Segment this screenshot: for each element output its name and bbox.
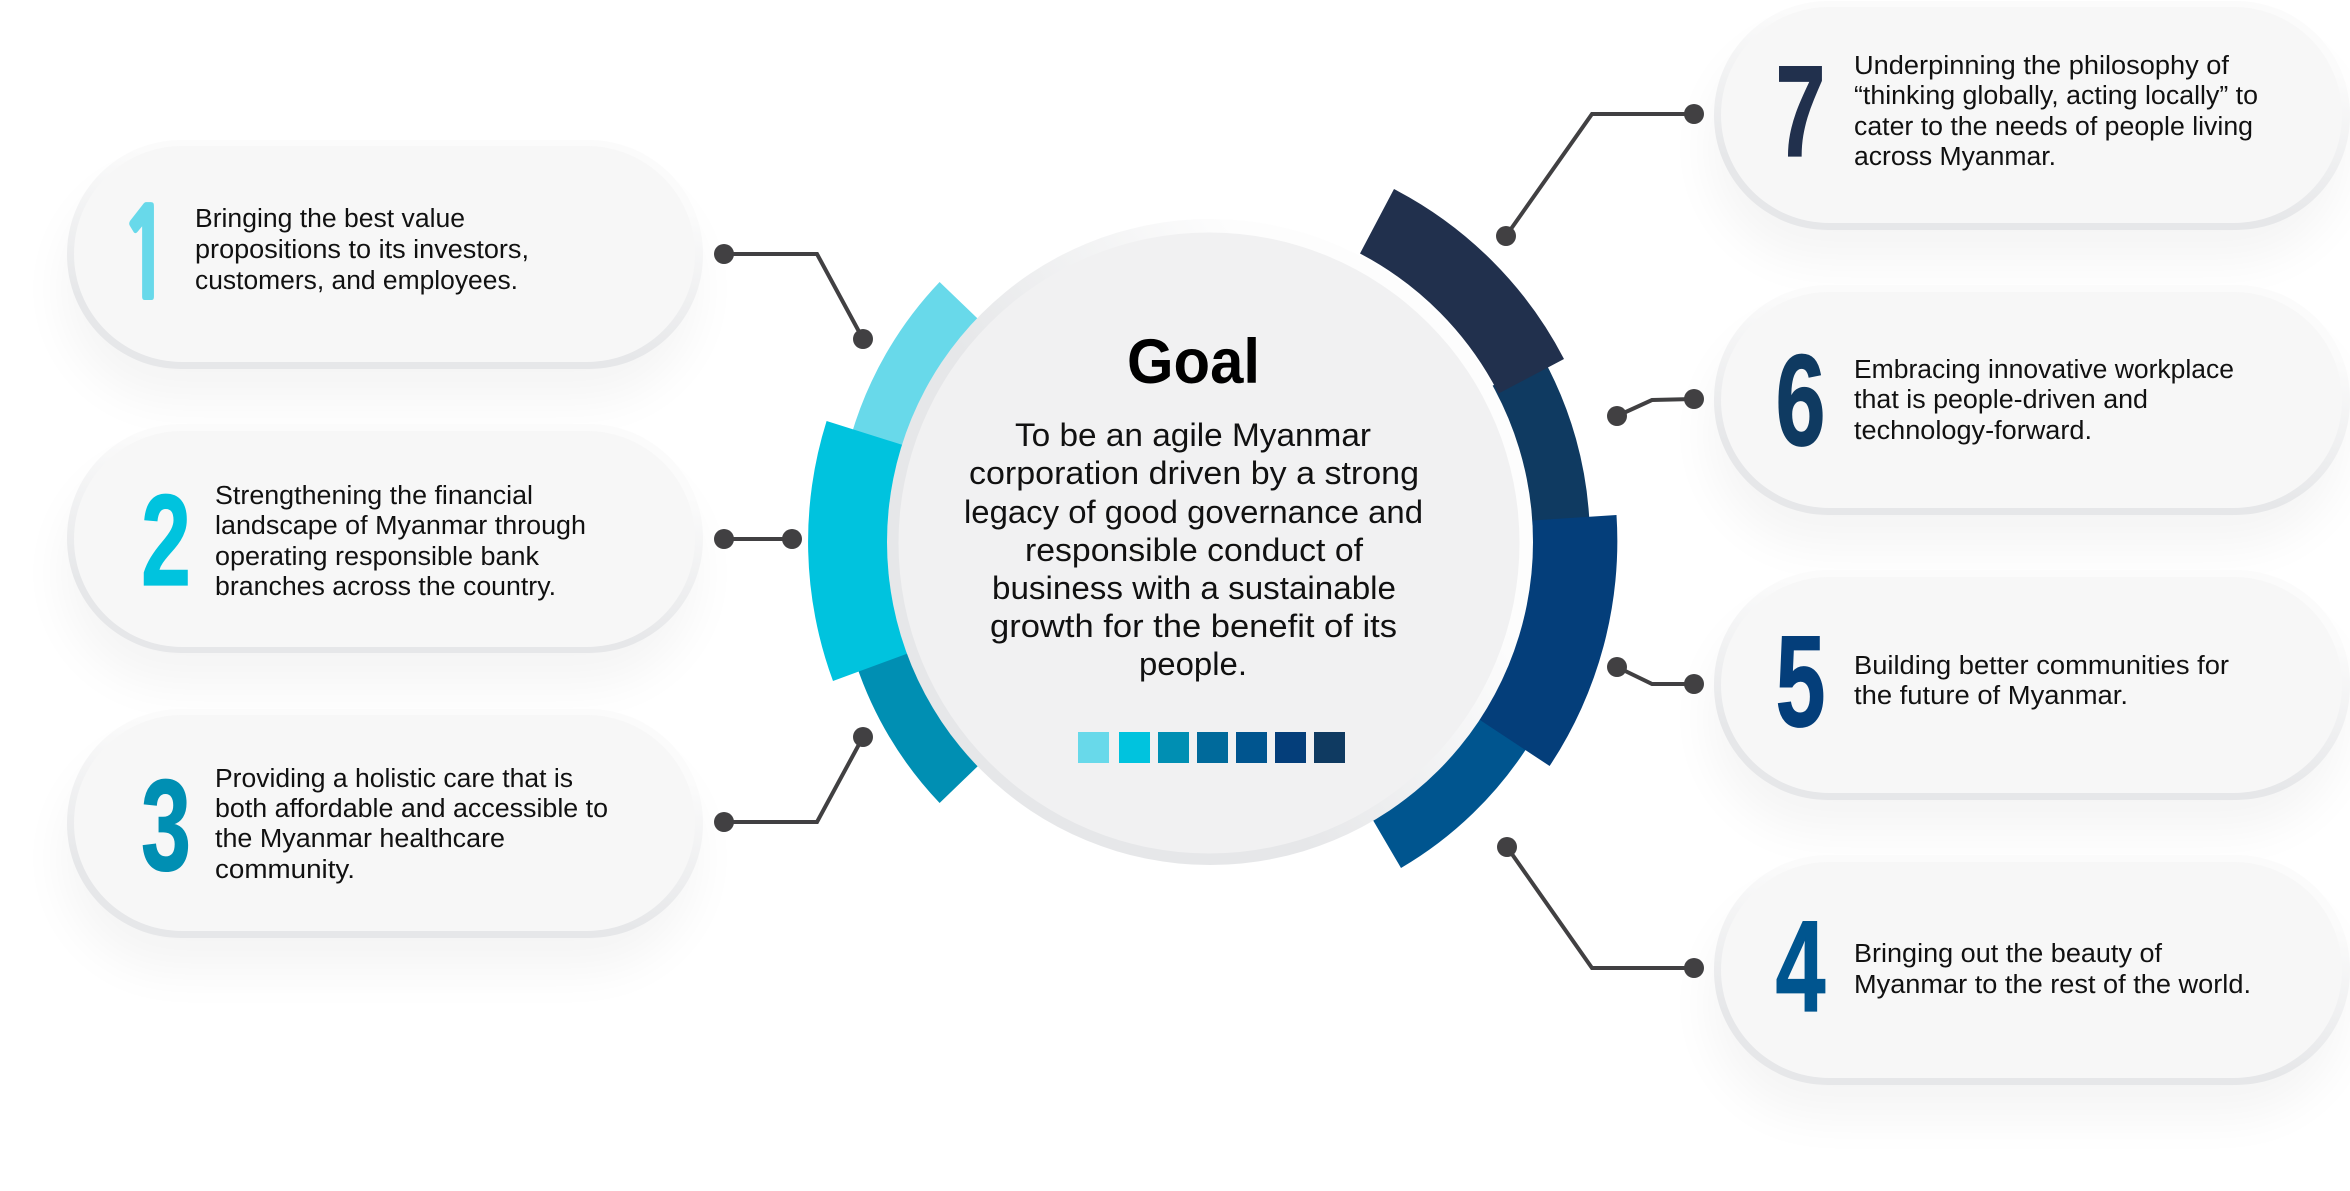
text: item 6 bbox=[1854, 356, 2234, 445]
connector 7 bbox=[1496, 104, 1704, 246]
number 1: 1 bbox=[119, 194, 173, 318]
text: item 6: that is people-driven and bbox=[1854, 386, 2148, 414]
text: item 5: Building better communities for bbox=[1854, 652, 2230, 680]
text: item 3: community. bbox=[215, 856, 355, 884]
text: item 4 bbox=[1854, 940, 2251, 999]
arc segment 7 bbox=[1360, 189, 1564, 394]
text: item 4: Bringing out the beauty of bbox=[1854, 940, 2163, 968]
text: goal statement: people. bbox=[1139, 646, 1247, 682]
text: item 3: both affordable and accessible to bbox=[215, 795, 608, 823]
panel: item 2 bbox=[62, 424, 703, 687]
text: item 2: branches across the country. bbox=[215, 573, 556, 601]
panel: item 5 bbox=[1709, 570, 2350, 833]
text: item 5 bbox=[1854, 652, 2230, 710]
number 6: 6 bbox=[1776, 327, 1825, 473]
number 5: 5 bbox=[1776, 608, 1825, 754]
text: goal statement: legacy of good governance and bbox=[964, 494, 1423, 530]
center circle bbox=[887, 219, 1533, 865]
text: goal statement bbox=[964, 417, 1423, 682]
panel: item 3 bbox=[62, 709, 703, 972]
arc segment 1 bbox=[851, 282, 994, 458]
connector 3 bbox=[714, 727, 873, 832]
text: goal statement: business with a sustainable bbox=[992, 570, 1396, 606]
text: item 4: Myanmar to the rest of the world. bbox=[1854, 971, 2251, 999]
panel: item 4 bbox=[1709, 855, 2350, 1118]
text: item 7 bbox=[1854, 52, 2258, 171]
panel: item 1 bbox=[62, 140, 703, 403]
colour legend squares bbox=[1078, 732, 1345, 763]
text: item 5: the future of Myanmar. bbox=[1854, 682, 2128, 710]
text: item 7: cater to the needs of people living bbox=[1854, 113, 2253, 141]
text: goal statement: corporation driven by a strong bbox=[969, 455, 1419, 491]
number 4: 4 bbox=[1776, 893, 1825, 1039]
text: item 1: propositions to its investors, bbox=[195, 236, 529, 264]
text: item 1: Bringing the best value bbox=[195, 205, 465, 233]
text: item 2: operating responsible bank bbox=[215, 543, 539, 571]
arc segment 2 bbox=[808, 421, 929, 681]
connector 4 bbox=[1497, 837, 1704, 978]
text: item 6: Embracing innovative workplace bbox=[1854, 356, 2234, 384]
text: item 2: landscape of Myanmar through bbox=[215, 512, 586, 540]
panel: item 6 bbox=[1709, 285, 2350, 548]
heading: Goal: Goal bbox=[1127, 327, 1260, 397]
text: item 3: the Myanmar healthcare bbox=[215, 825, 505, 853]
arc segment 4 bbox=[1362, 700, 1530, 868]
text: item 1: customers, and employees. bbox=[195, 267, 518, 295]
text: goal statement: growth for the benefit of its bbox=[990, 608, 1397, 644]
text: item 7: Underpinning the philosophy of bbox=[1854, 52, 2230, 80]
text: goal statement: responsible conduct of bbox=[1025, 532, 1363, 568]
text: item 2 bbox=[215, 482, 586, 601]
text: item 7: “thinking globally, acting locally” to bbox=[1854, 82, 2258, 110]
arc segment 5 bbox=[1460, 515, 1617, 766]
text: item 3 bbox=[215, 765, 608, 884]
text: goal statement: To be an agile Myanmar bbox=[1015, 417, 1371, 453]
number 7: 7 bbox=[1776, 38, 1825, 184]
text: item 2: Strengthening the financial bbox=[215, 482, 533, 510]
arc segment 3 bbox=[856, 640, 994, 803]
number 2: 2 bbox=[141, 467, 191, 613]
text: item 1 bbox=[195, 205, 529, 295]
text: item 7: across Myanmar. bbox=[1854, 143, 2056, 171]
connector 2 bbox=[714, 529, 802, 549]
arc segment 6 bbox=[1472, 358, 1590, 528]
number 3: 3 bbox=[141, 752, 191, 898]
panel: item 7 bbox=[1709, 1, 2350, 263]
connector 5 bbox=[1607, 657, 1704, 694]
connector 6 bbox=[1607, 389, 1704, 426]
connector 1 bbox=[714, 244, 873, 349]
text: item 6: technology-forward. bbox=[1854, 417, 2092, 445]
text: item 3: Providing a holistic care that is bbox=[215, 765, 573, 793]
